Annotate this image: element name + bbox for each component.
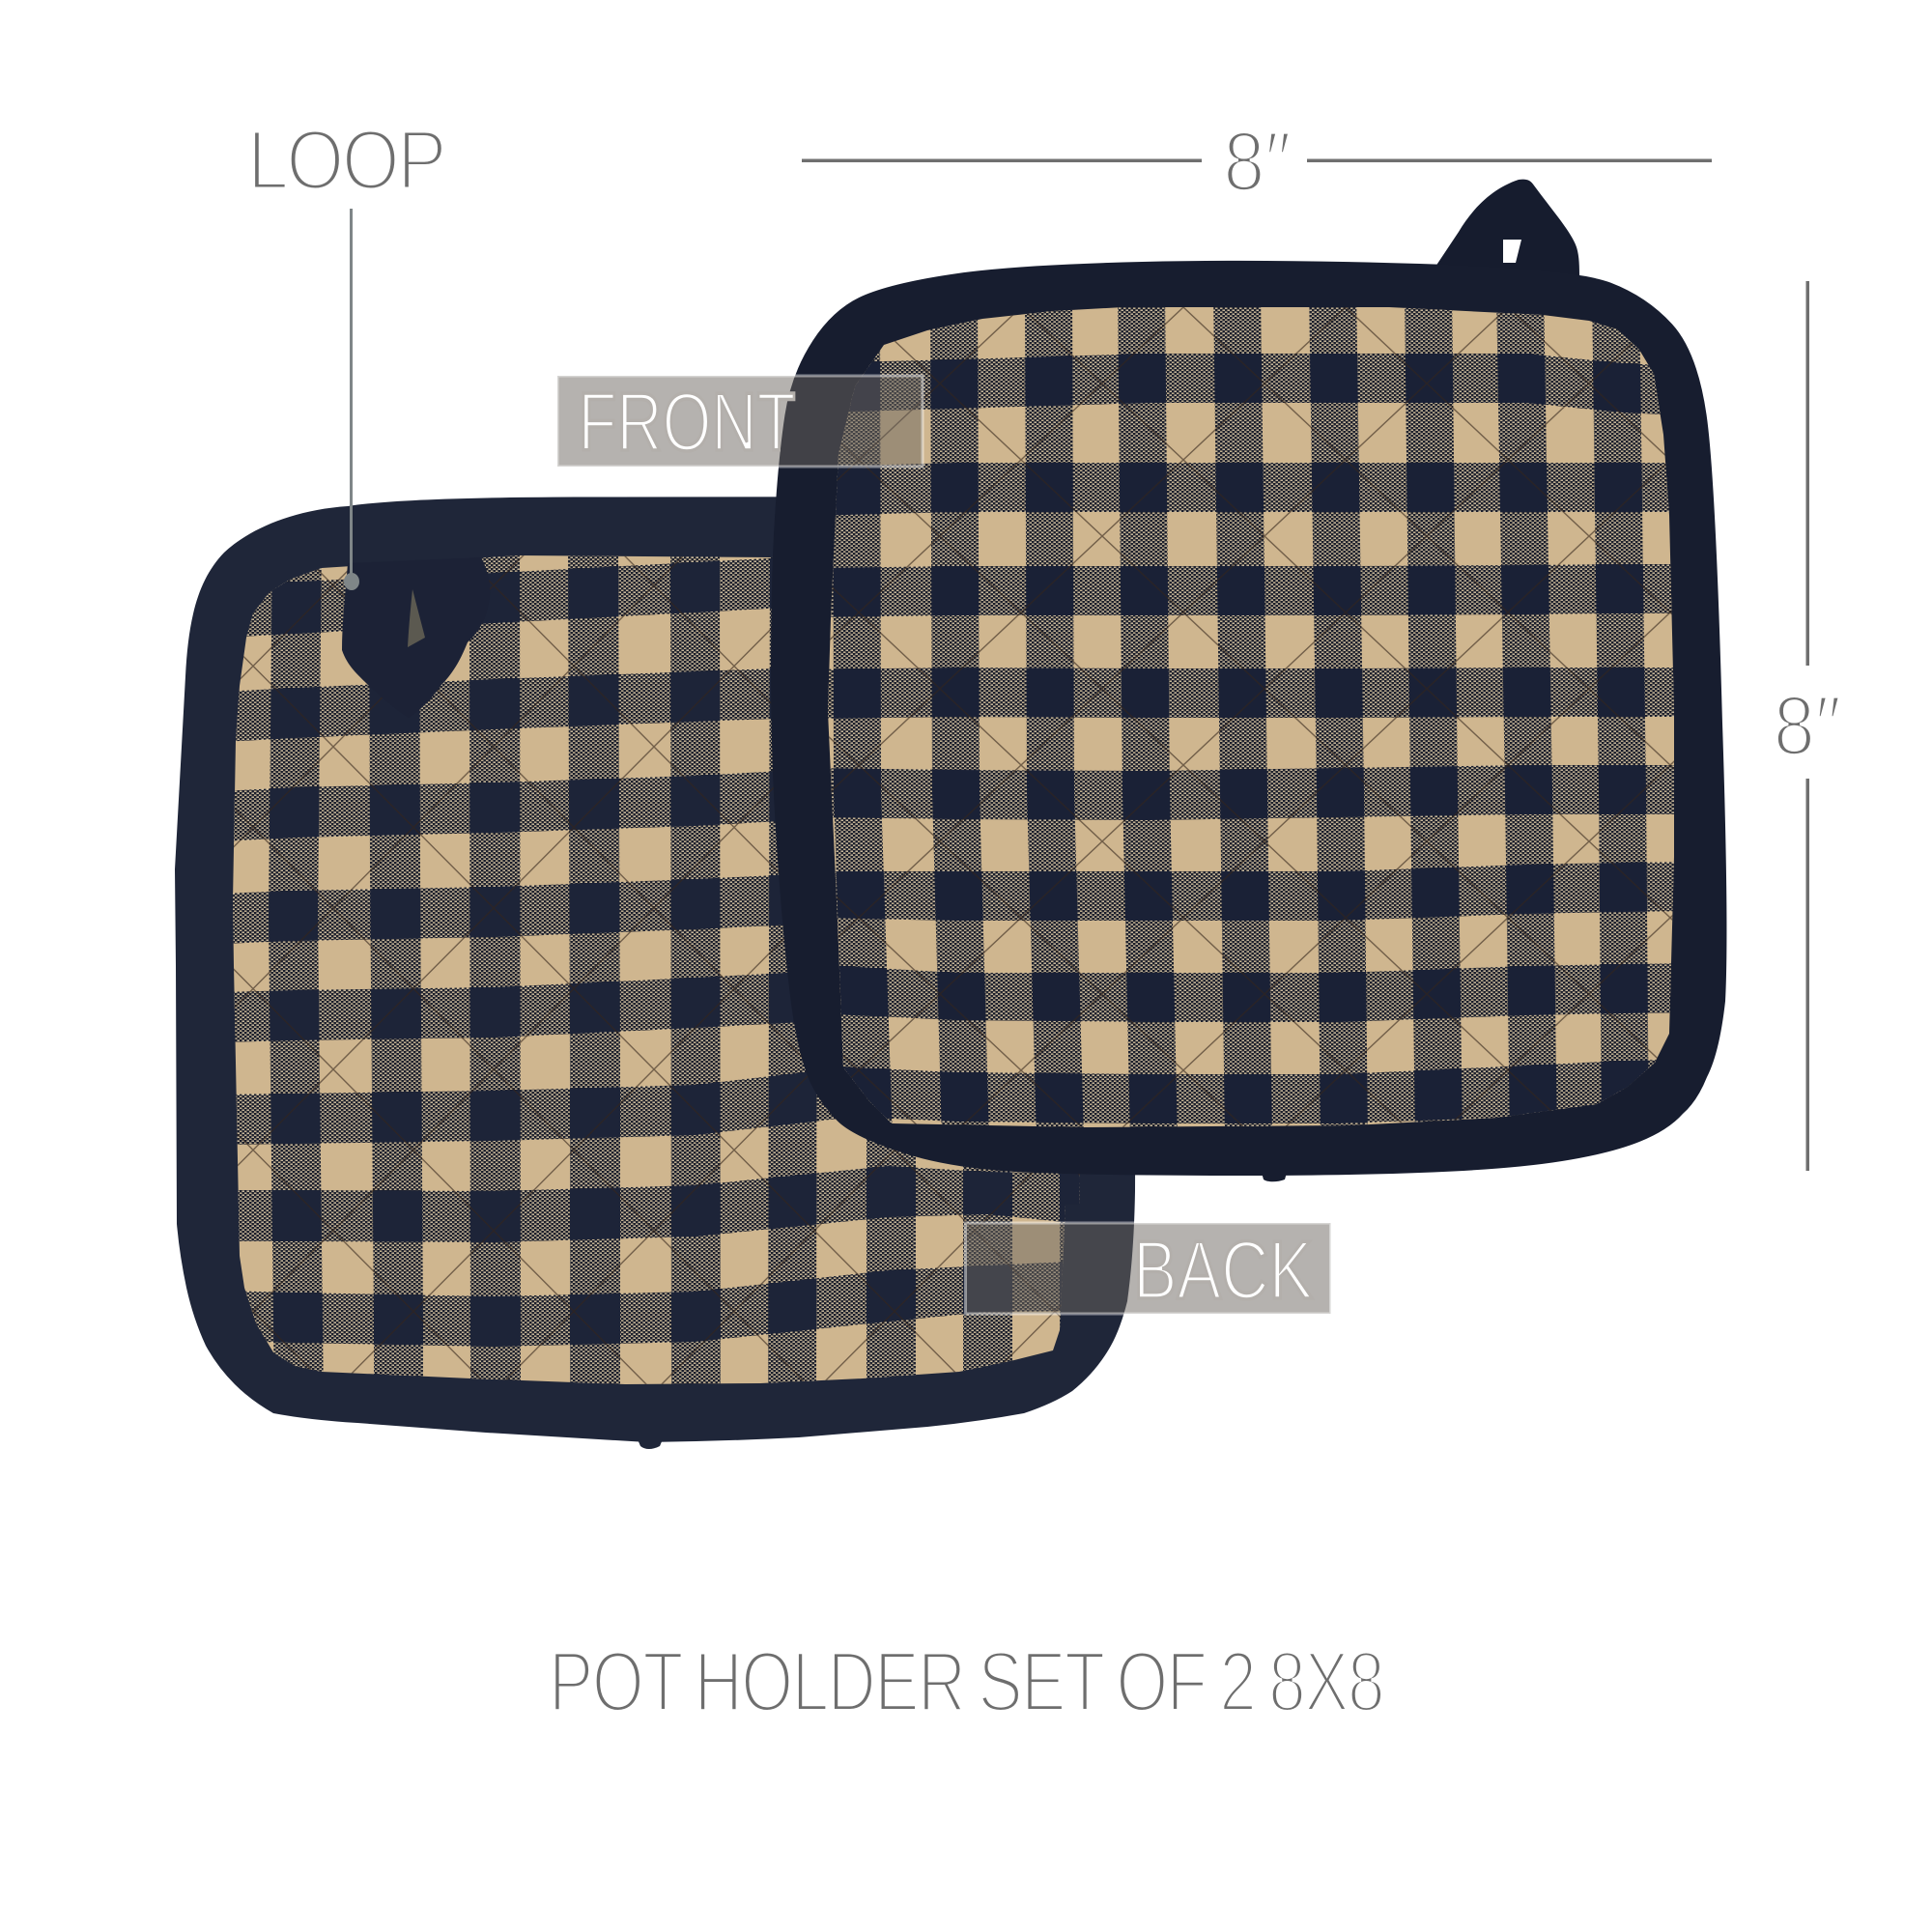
dimension: height 8 inches: [1774, 281, 1841, 1171]
back pot holder folded loop: [342, 557, 490, 718]
back pot holder seam tab: [638, 1439, 663, 1449]
width line right: [1307, 158, 1712, 162]
FRONT translucent tag: [557, 376, 923, 467]
back pot holder binding: [175, 497, 1138, 1442]
LOOP leader dot: [344, 573, 359, 590]
LOOP text: LOOP: [247, 114, 444, 207]
height line bottom: [1806, 779, 1809, 1171]
BACK text: BACK: [1133, 1225, 1313, 1317]
height line top: [1806, 281, 1809, 666]
height value: 8″: [1774, 679, 1841, 773]
callout: LOOP: [247, 114, 444, 590]
front pot holder gingham fabric: [811, 290, 1700, 1140]
width value: 8″: [1223, 115, 1291, 209]
pot holder: back: [175, 497, 1138, 1449]
front pot holder seam tab: [1262, 1173, 1287, 1181]
label: FRONT: [557, 376, 923, 469]
title: POT HOLDER SET OF 2 8X8: [549, 1634, 1383, 1729]
dimension: width 8 inches: [802, 115, 1712, 209]
loop opening: [1503, 240, 1521, 263]
front pot holder hanging loop: [1430, 180, 1579, 275]
LOOP leader line: [350, 209, 353, 582]
front pot holder binding: [771, 261, 1726, 1176]
pot holder: front: [771, 180, 1726, 1181]
back pot holder gingham fabric: [222, 541, 1111, 1401]
label: BACK: [966, 1223, 1331, 1317]
BACK translucent tag: [966, 1223, 1331, 1314]
FRONT text: FRONT: [578, 377, 796, 469]
width line left: [802, 158, 1202, 162]
